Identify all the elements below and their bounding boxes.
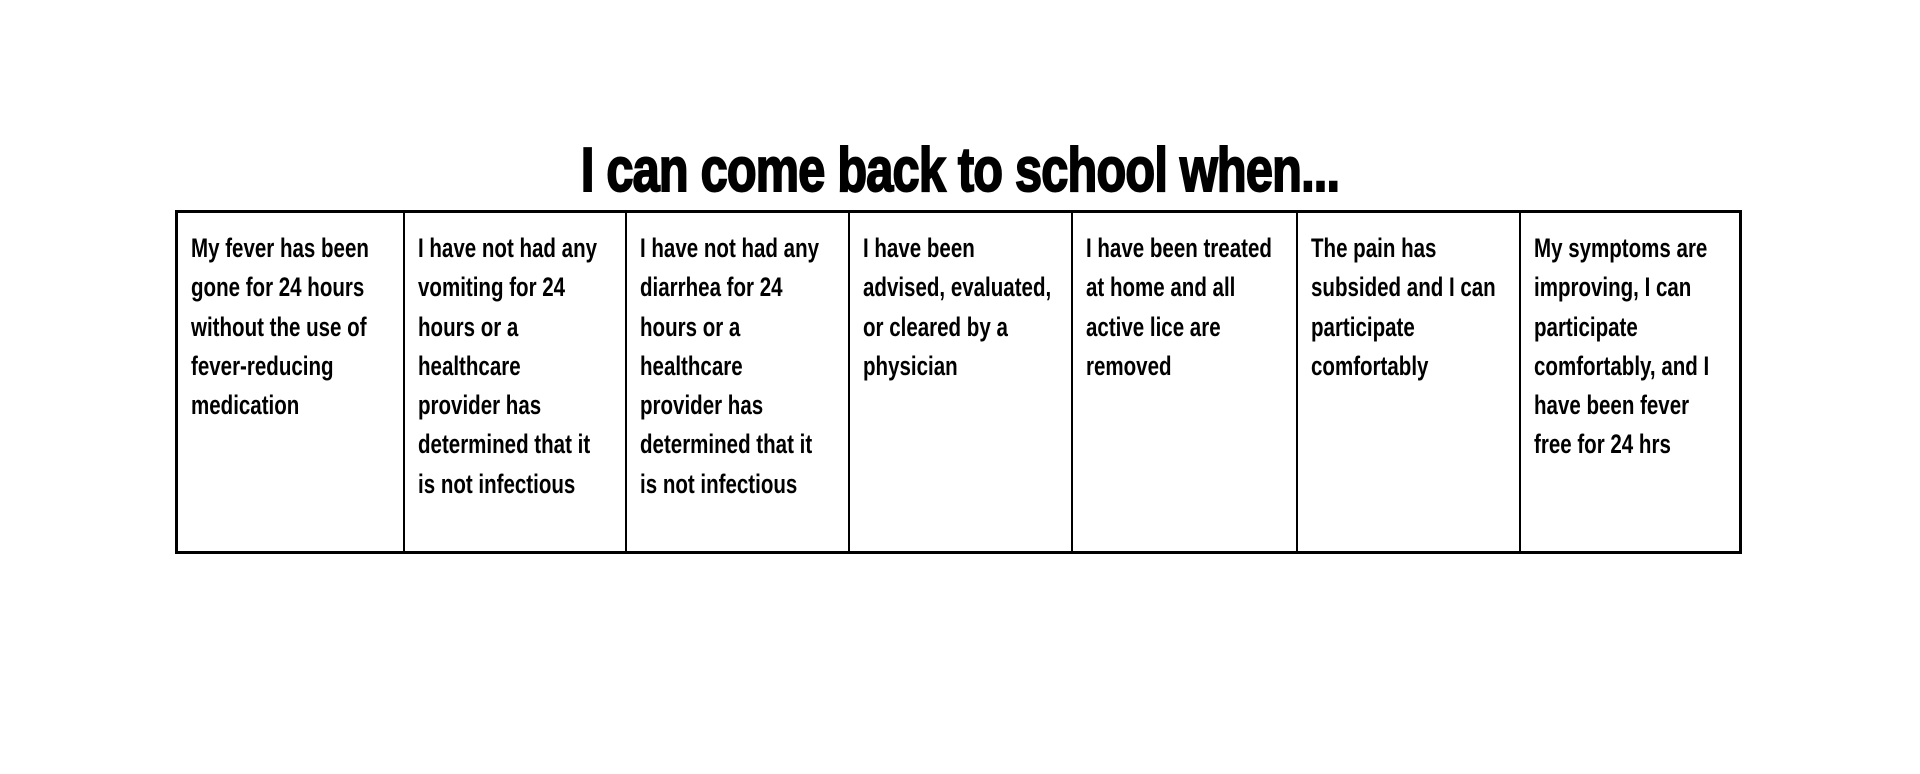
cell: diarrhea: hours or a [640, 312, 740, 342]
cell: symptoms: improving, I can [1534, 272, 1691, 302]
cell: fever: medication [191, 390, 299, 420]
cell: vomiting: healthcare [418, 351, 521, 381]
cell: pain: participate [1311, 312, 1415, 342]
cell: fever: gone for 24 hours [191, 272, 364, 302]
cell: physician [850, 213, 1073, 551]
cell: diarrhea: provider has [640, 390, 763, 420]
cell: pain: comfortably [1311, 351, 1428, 381]
cell: lice [1073, 213, 1298, 551]
cell: physician: advised, evaluated, [863, 272, 1051, 302]
cell: diarrhea: I have not had any [640, 233, 819, 263]
cell: diarrhea [627, 213, 850, 551]
cell: fever: without the use of [191, 312, 367, 342]
cell: vomiting: I have not had any [418, 233, 597, 263]
title: I can come back to school when... [581, 136, 1339, 205]
cell: vomiting: provider has [418, 390, 541, 420]
cell: vomiting: vomiting for 24 [418, 272, 565, 302]
cell: diarrhea: is not infectious [640, 469, 797, 499]
cell: lice: active lice are [1086, 312, 1221, 342]
cell: lice: at home and all [1086, 272, 1235, 302]
cell: physician: I have been [863, 233, 975, 263]
cell: symptoms [1534, 233, 1709, 459]
cell: symptoms: have been fever [1534, 390, 1689, 420]
cell: vomiting [405, 213, 627, 551]
cell: symptoms: My symptoms are [1534, 233, 1707, 263]
cell: vomiting: determined that it [418, 429, 590, 459]
cell: physician: or cleared by a [863, 312, 1008, 342]
cell: symptoms: participate [1534, 312, 1638, 342]
table of return criteria [175, 210, 1742, 554]
cell: diarrhea: healthcare [640, 351, 743, 381]
cell: physician: physician [863, 351, 958, 381]
cell: vomiting: hours or a [418, 312, 518, 342]
cell: pain: subsided and I can [1311, 272, 1496, 302]
cell: lice: removed [1086, 351, 1172, 381]
cell: pain: The pain has [1311, 233, 1436, 263]
cell: symptoms: free for 24 hrs [1534, 429, 1671, 459]
cell: fever: My fever has been [191, 233, 369, 263]
cell: diarrhea: diarrhea for 24 [640, 272, 783, 302]
cell: fever [178, 213, 405, 551]
cell: fever: fever-reducing [191, 351, 334, 381]
cell: symptoms: comfortably, and I [1534, 351, 1709, 381]
cell: diarrhea: determined that it [640, 429, 812, 459]
cell: pain [1298, 213, 1521, 551]
cell: vomiting: is not infectious [418, 469, 575, 499]
cell: lice: I have been treated [1086, 233, 1272, 263]
